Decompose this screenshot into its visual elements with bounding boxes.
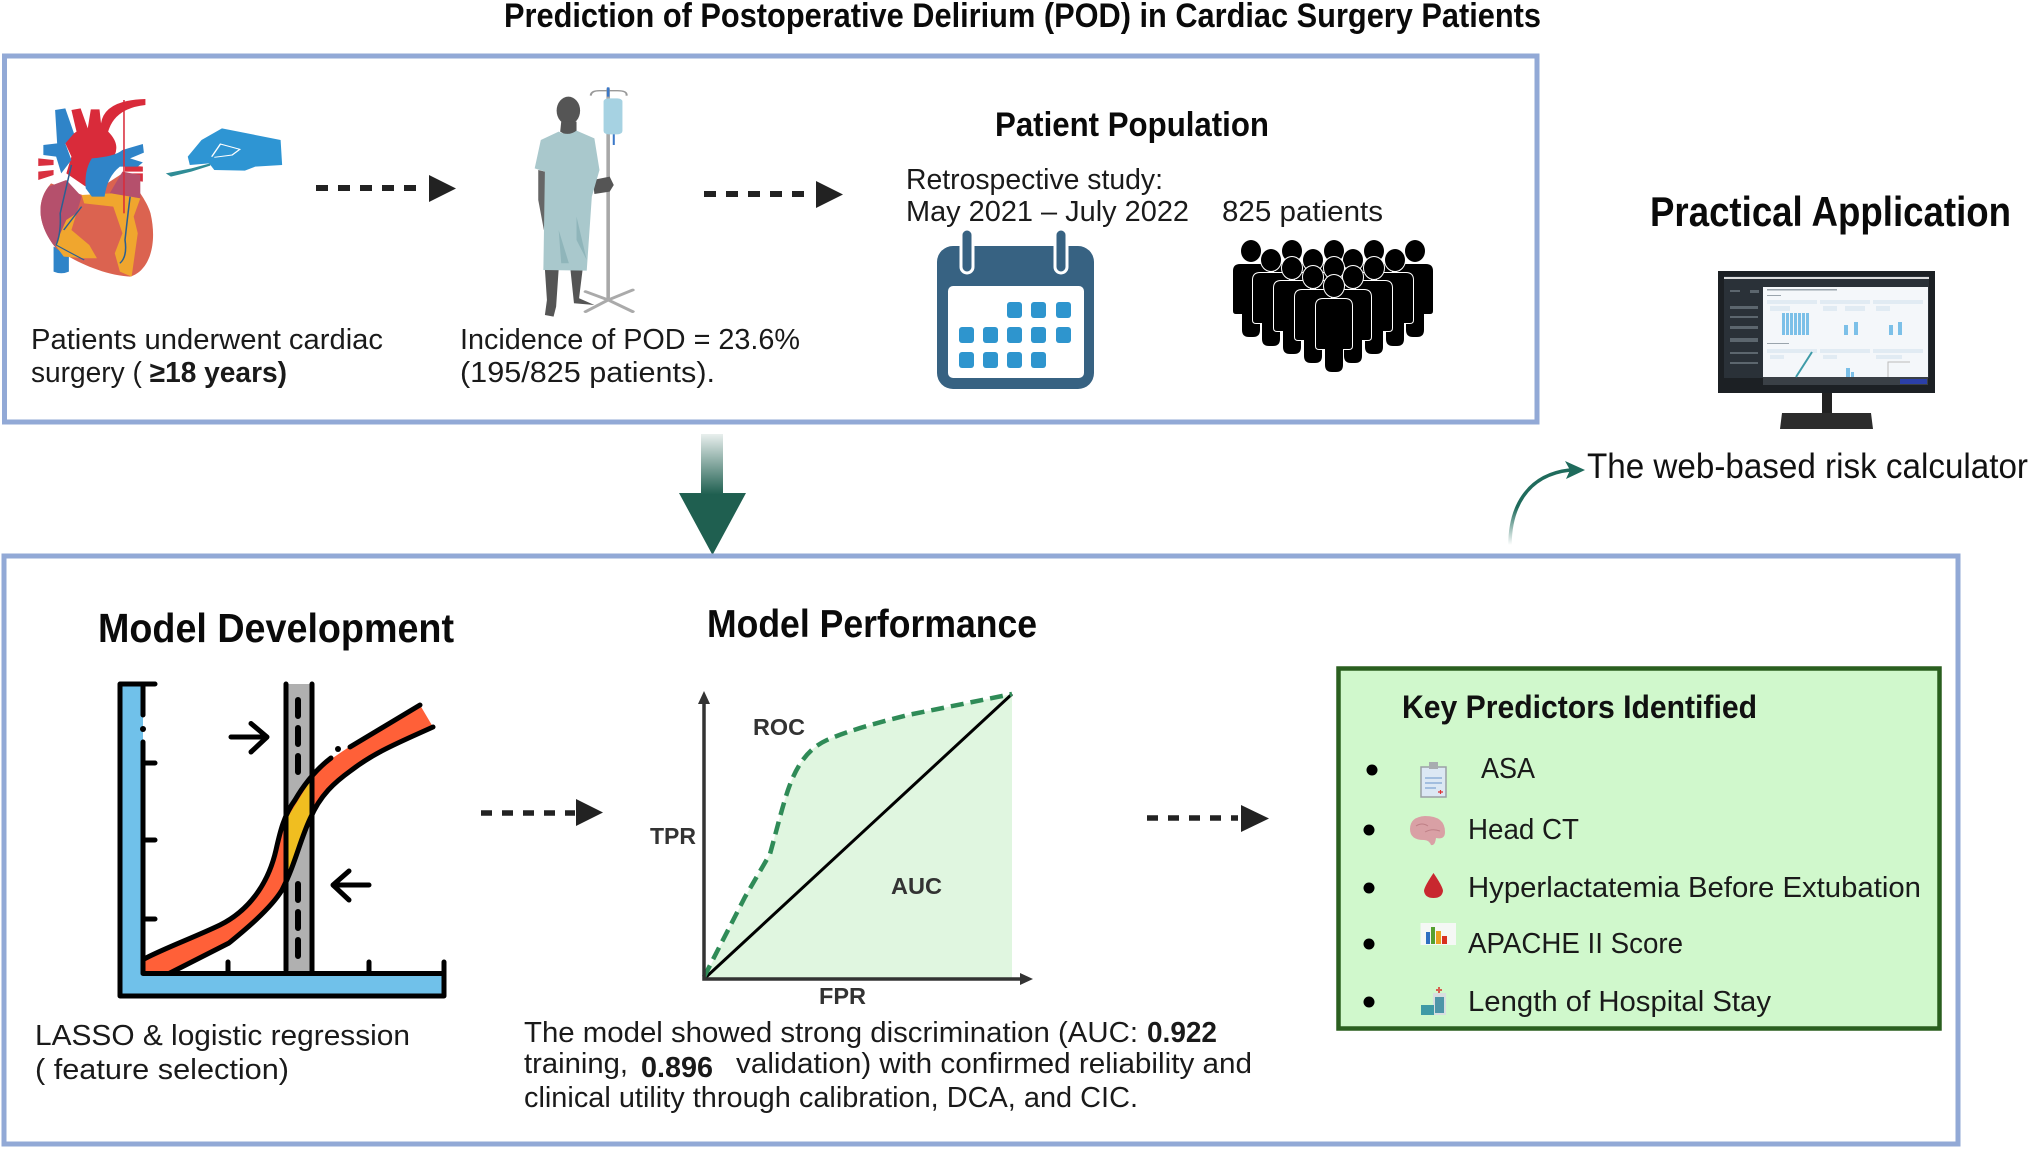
text: performance summary: The model showed strong discrimination (AUC: — [524, 1017, 1138, 1049]
text: performance summary — [524, 1017, 1252, 1114]
text: incidence: Incidence of POD = 23.6% — [460, 324, 800, 356]
icon: calendar — [937, 229, 1094, 389]
icon: brain — [1410, 816, 1445, 845]
text: surgery criteria — [31, 324, 383, 389]
label: FPR: FPR — [819, 983, 866, 1009]
text: LASSO description — [35, 1020, 410, 1086]
chart: LASSO curve — [120, 684, 444, 996]
text: LASSO description: LASSO & logistic regression — [35, 1020, 410, 1052]
text: ASA: ASA — [1481, 753, 1536, 785]
text: performance summary: 0.922 — [1147, 1017, 1217, 1049]
arrow — [1147, 805, 1269, 832]
text: length of stay: Length of Hospital Stay — [1468, 986, 1772, 1018]
icon: hospital — [1421, 987, 1446, 1015]
text: LASSO description: ( feature selection) — [35, 1054, 289, 1086]
text: performance summary: clinical utility through calibration, DCA, and CIC. — [524, 1082, 1138, 1114]
icon: monitor with dashboard — [1718, 271, 1935, 429]
heading: patient population: Patient Population — [995, 106, 1269, 144]
arrow: curved to calculator — [1510, 461, 1585, 545]
icon: bar chart — [1420, 923, 1456, 945]
label: ROC: ROC — [753, 714, 805, 740]
label: TPR: TPR — [650, 823, 696, 849]
icon: heart — [38, 99, 153, 277]
text: performance summary: 0.896 — [641, 1052, 713, 1084]
text: study period: Retrospective study: — [906, 164, 1163, 196]
panel: modelling — [4, 556, 1958, 1144]
text: surgery criteria: surgery ( ≥18 years) — [31, 357, 287, 389]
icon: gloved hand with scalpel — [166, 128, 282, 177]
text: APACHE II: APACHE II Score — [1468, 928, 1683, 960]
text: study period — [906, 164, 1189, 228]
text: surgery criteria: Patients underwent cardiac — [31, 324, 383, 356]
text: performance summary: validation) with confirmed reliability and — [736, 1048, 1252, 1080]
text: incidence: (195/825 patients). — [460, 357, 715, 389]
text: hyperlactatemia: Hyperlactatemia Before Extubation — [1468, 872, 1921, 904]
label: AUC: AUC — [891, 873, 942, 899]
chart: ROC curve — [650, 691, 1033, 1009]
text: study period: May 2021 – July 2022 — [906, 196, 1189, 228]
arrow — [316, 175, 456, 202]
heading: model development: Model Development — [98, 605, 454, 651]
heading: key predictors: Key Predictors Identified — [1402, 689, 1757, 725]
text: patient count: 825 patients — [1222, 196, 1383, 228]
heading: model performance: Model Performance — [707, 603, 1037, 646]
text: performance summary: training, — [524, 1048, 628, 1080]
text: incidence — [460, 324, 800, 389]
panel: patient cohort — [4, 56, 1537, 422]
list bullets — [1364, 764, 1378, 1008]
icon: clipboard — [1421, 762, 1446, 797]
panel: key predictors — [1338, 668, 1940, 1028]
icon: patient with IV stand — [535, 87, 633, 317]
arrow — [481, 799, 603, 826]
text: Head CT: Head CT — [1468, 814, 1579, 846]
arrow — [704, 181, 843, 208]
icon: blood drop — [1424, 873, 1443, 898]
icon: patient crowd — [1233, 240, 1433, 372]
arrow: down to modelling — [679, 434, 746, 555]
